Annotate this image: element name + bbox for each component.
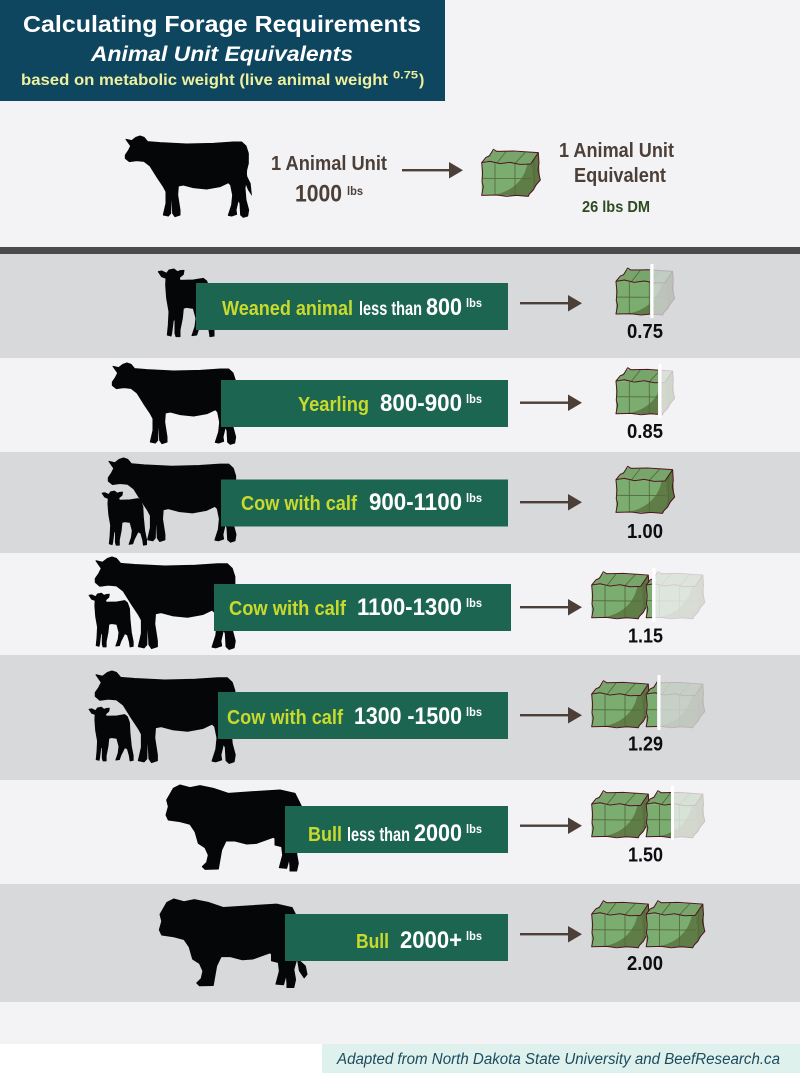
panel: one animal unit bbox=[125, 136, 674, 217]
label bar: Bull bbox=[356, 930, 389, 953]
hay: 1.15 bbox=[592, 568, 705, 622]
footer bbox=[0, 1044, 800, 1073]
subtitle: Animal Unit Equivalents bbox=[90, 42, 353, 66]
row: bull 2000+ bbox=[159, 899, 705, 987]
hay: 0.85 bbox=[616, 364, 675, 418]
label bar bbox=[285, 914, 508, 961]
label bar bbox=[221, 380, 508, 427]
row: weaned animal bbox=[158, 264, 675, 343]
icon: cow and calf bbox=[89, 671, 235, 763]
label bar: Yearling bbox=[298, 393, 369, 416]
label bar: Cow with calf bbox=[241, 492, 357, 515]
label bar: 800-900 bbox=[380, 390, 462, 417]
value: 0.75 bbox=[627, 321, 663, 343]
label bar: lbs bbox=[466, 596, 482, 610]
label bar: lbs bbox=[466, 822, 482, 836]
label bar: lbs bbox=[466, 705, 482, 719]
label bar bbox=[221, 480, 508, 526]
label bar bbox=[196, 283, 508, 330]
icon: calf bbox=[158, 269, 214, 337]
one animal unit label: 1 Animal Unit bbox=[271, 152, 387, 175]
arrow bbox=[520, 599, 582, 616]
one animal unit equivalent label: Equivalent bbox=[574, 164, 666, 187]
row: yearling bbox=[112, 363, 675, 444]
row: bull less than 2000 bbox=[166, 785, 705, 871]
one animal unit label: 1000 bbox=[295, 180, 342, 208]
arrow bbox=[520, 818, 582, 834]
label bar: Weaned animal bbox=[222, 297, 353, 320]
label bar bbox=[285, 806, 508, 853]
arrow bbox=[520, 394, 582, 411]
arrow bbox=[402, 162, 463, 178]
icon: cow and calf bbox=[102, 458, 236, 545]
value: 1.15 bbox=[628, 626, 663, 648]
label bar bbox=[218, 692, 508, 739]
value: 0.85 bbox=[627, 421, 663, 443]
arrow bbox=[520, 926, 582, 942]
title note: 0.75 bbox=[393, 70, 418, 82]
icon: cow and calf bbox=[89, 557, 235, 649]
one animal unit equivalent label: 1 Animal Unit bbox=[559, 139, 674, 162]
label bar: lbs bbox=[466, 392, 482, 406]
label bar: lbs bbox=[466, 296, 482, 310]
hay: 1.00 bbox=[616, 466, 675, 513]
row: cow with calf 1300-1500 bbox=[89, 671, 705, 763]
label bar: Cow with calf bbox=[229, 597, 346, 620]
label bar: 900-1100 bbox=[369, 489, 462, 516]
value: 1.50 bbox=[628, 845, 663, 867]
icon: bull bbox=[166, 785, 302, 871]
one animal unit label: lbs bbox=[347, 184, 363, 198]
hay: 0.75 bbox=[616, 264, 675, 318]
icon: bull bbox=[159, 899, 308, 987]
label bar: Bull bbox=[308, 823, 342, 846]
row: cow with calf 900-1100 bbox=[102, 458, 675, 545]
hay: 1.50 bbox=[592, 786, 705, 840]
icon: cow bbox=[112, 363, 236, 444]
title: Calculating Forage Requirements bbox=[23, 11, 421, 37]
value: 2.00 bbox=[627, 953, 663, 975]
label bar: 1300 -1500 bbox=[354, 703, 462, 730]
label bar: less than bbox=[347, 825, 410, 846]
label bar: 2000 bbox=[414, 820, 462, 847]
dry matter amount: 26 lbs DM bbox=[582, 199, 650, 216]
arrow bbox=[520, 295, 582, 312]
arrow bbox=[520, 494, 582, 510]
arrow bbox=[520, 707, 582, 724]
label bar bbox=[214, 584, 511, 631]
row: cow with calf 1100-1300 bbox=[89, 557, 705, 649]
icon: hay bale bbox=[482, 149, 540, 196]
label bar: lbs bbox=[466, 491, 482, 505]
label bar: Cow with calf bbox=[227, 706, 343, 729]
icon: cow bbox=[125, 136, 252, 217]
one animal unit label bbox=[271, 152, 387, 208]
source credit: Adapted from North Dakota State University and BeefResearch.ca bbox=[336, 1051, 780, 1068]
label bar: 800 bbox=[426, 294, 462, 321]
label bar: 1100-1300 bbox=[357, 594, 462, 621]
value: 1.29 bbox=[628, 734, 663, 756]
label bar: lbs bbox=[466, 929, 482, 943]
label bar: less than bbox=[359, 299, 422, 320]
hay: 1.29 bbox=[592, 675, 705, 730]
title note: based on metabolic weight (live animal weight bbox=[21, 72, 389, 89]
title note: ) bbox=[419, 72, 424, 89]
one animal unit equivalent label bbox=[559, 139, 674, 187]
label bar: 2000+ bbox=[400, 927, 462, 954]
hay: 2.00 bbox=[592, 901, 705, 948]
row backgrounds bbox=[0, 254, 800, 1002]
value: 1.00 bbox=[627, 521, 663, 543]
title banner bbox=[0, 0, 445, 101]
